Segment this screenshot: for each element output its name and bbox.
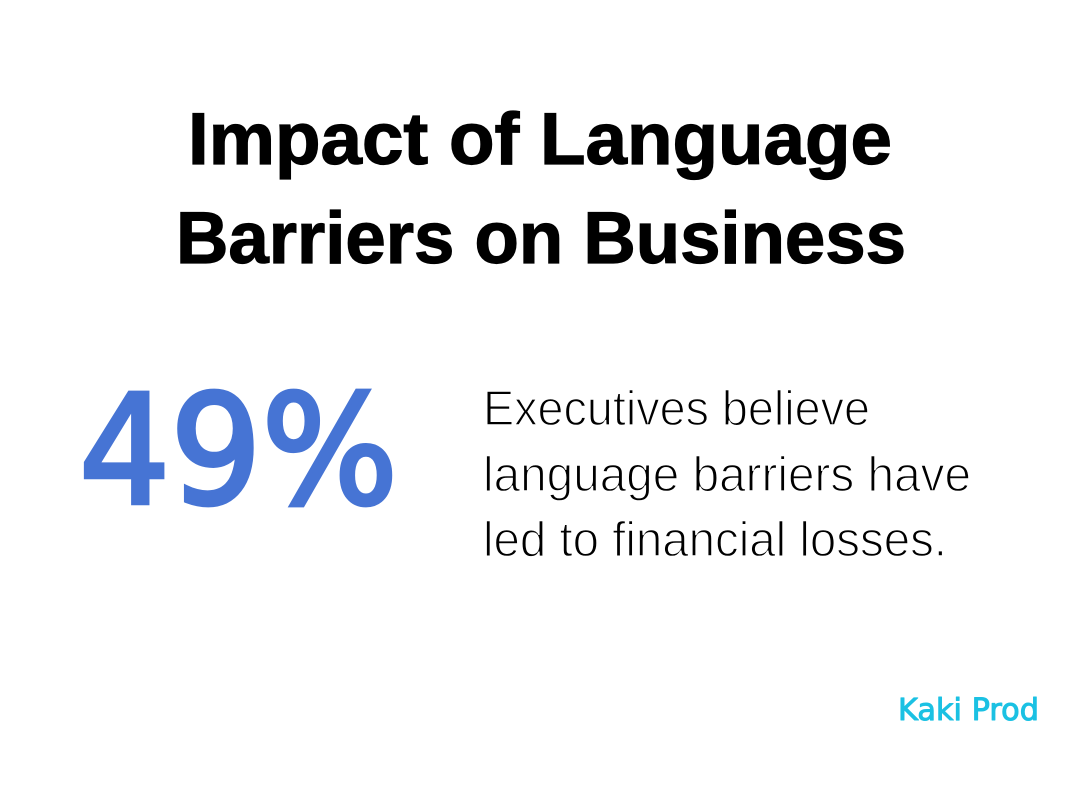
title: Impact of Language (188, 99, 892, 180)
statistic: 49%: 49% (79, 363, 398, 539)
description text: led to financial losses. (483, 513, 947, 567)
description text: language barriers have (483, 448, 971, 502)
logo: Kaki Prod: Kaki Prod (898, 693, 1039, 728)
title: Barriers on Business (176, 198, 906, 279)
title (176, 99, 906, 279)
description text: Executives believe (483, 382, 870, 436)
description text (483, 382, 971, 567)
